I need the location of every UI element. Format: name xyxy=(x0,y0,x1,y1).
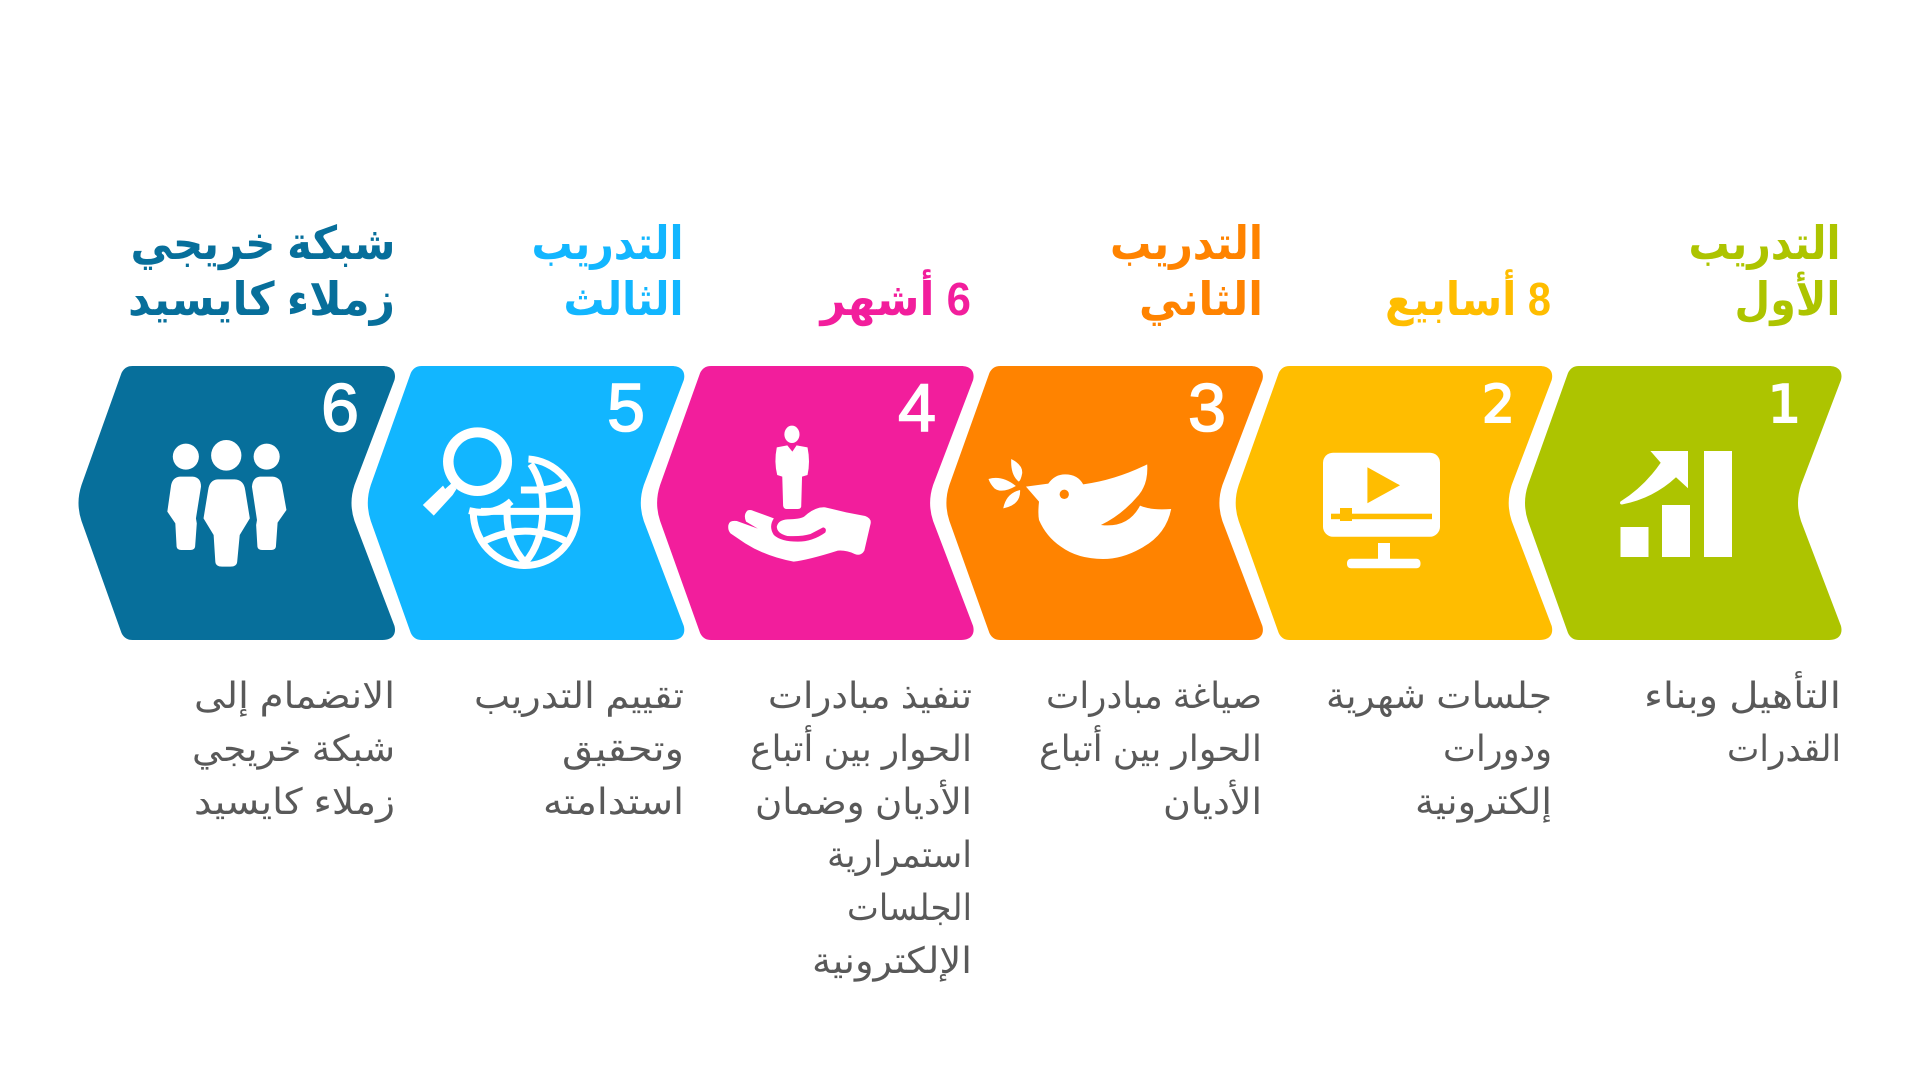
description: step 2 xyxy=(1326,675,1552,823)
chevron panel: step 6 xyxy=(78,366,395,640)
chevron panel: step 2 xyxy=(1236,366,1552,640)
icon: magnifier over globe xyxy=(423,422,577,566)
description: step 3 xyxy=(1039,675,1262,822)
number 3: 3 xyxy=(1188,370,1226,446)
heading: step 3: التدريب xyxy=(1110,217,1263,270)
description: step 3: الأديان xyxy=(1163,779,1262,822)
description: step 1: القدرات xyxy=(1727,728,1841,770)
heading: step 1 xyxy=(1688,217,1840,326)
heading: step 1: الأول xyxy=(1734,271,1840,326)
description: step 4: تنفيذ مبادرات xyxy=(768,675,972,717)
heading: step 6 xyxy=(128,217,396,326)
chevron panel: step 3 xyxy=(946,366,1263,640)
description: step 2: إلكترونية xyxy=(1415,781,1552,823)
description: step 5: تقييم التدريب xyxy=(474,675,684,717)
heading: step 6: زملاء كايسيد xyxy=(128,273,395,326)
heading: step 5: الثالث xyxy=(564,273,684,325)
description: step 3: الحوار بين أتباع xyxy=(1039,725,1262,770)
heading: step 1: التدريب xyxy=(1688,217,1840,270)
description: step 4: استمرارية xyxy=(827,834,972,876)
description: step 6: الانضمام إلى xyxy=(194,675,395,717)
description: step 6 xyxy=(192,675,395,823)
heading: step 5: التدريب xyxy=(532,217,684,270)
description: step 6: زملاء كايسيد xyxy=(194,781,395,823)
description: step 3: صياغة مبادرات xyxy=(1046,675,1262,717)
number 5: 5 xyxy=(607,370,645,446)
icon: dove with olive branch xyxy=(989,459,1171,559)
number 4: 4 xyxy=(898,370,936,446)
chevron panel: step 5 xyxy=(368,366,684,640)
description: step 5: استدامته xyxy=(543,781,684,822)
step 5 xyxy=(368,217,684,822)
chevron panel: step 1 xyxy=(1525,366,1842,640)
step 6 xyxy=(78,217,396,823)
description: step 4: الحوار بين أتباع xyxy=(750,725,972,770)
icon: rising bar chart xyxy=(1620,451,1732,557)
icon: video presentation screen xyxy=(1323,453,1440,568)
step 2 xyxy=(1236,269,1552,823)
description: step 4 xyxy=(750,675,972,982)
description: step 2: جلسات شهرية xyxy=(1326,675,1552,717)
heading: step 3: الثاني xyxy=(1139,273,1263,326)
icon: person on open hand xyxy=(728,426,871,562)
number 1: 1 xyxy=(1768,375,1801,435)
step 3 xyxy=(946,217,1263,822)
description: step 5 xyxy=(474,675,684,822)
chevron panel: step 4 xyxy=(657,366,974,640)
heading: step 5 xyxy=(532,217,684,325)
icon: three people xyxy=(167,440,286,567)
description: step 1: التأهيل وبناء xyxy=(1644,671,1841,717)
heading: step 6: شبكة خريجي xyxy=(130,217,396,270)
heading: step 2: 8 أسابيع xyxy=(1385,269,1551,326)
description: step 4: الإلكترونية xyxy=(812,940,972,982)
description: step 2: ودورات xyxy=(1443,728,1552,770)
description: step 5: وتحقيق xyxy=(562,728,684,770)
step 4 xyxy=(657,269,974,982)
description: step 4: الأديان وضمان xyxy=(755,779,972,823)
description: step 6: شبكة خريجي xyxy=(192,728,395,770)
number 6: 6 xyxy=(321,370,359,446)
step 1 xyxy=(1525,217,1842,770)
description: step 1 xyxy=(1644,671,1841,770)
heading: step 3 xyxy=(1110,217,1263,326)
description: step 4: الجلسات xyxy=(847,887,972,928)
heading: step 4: 6 أشهر xyxy=(819,269,971,326)
number 2: 2 xyxy=(1482,375,1515,435)
